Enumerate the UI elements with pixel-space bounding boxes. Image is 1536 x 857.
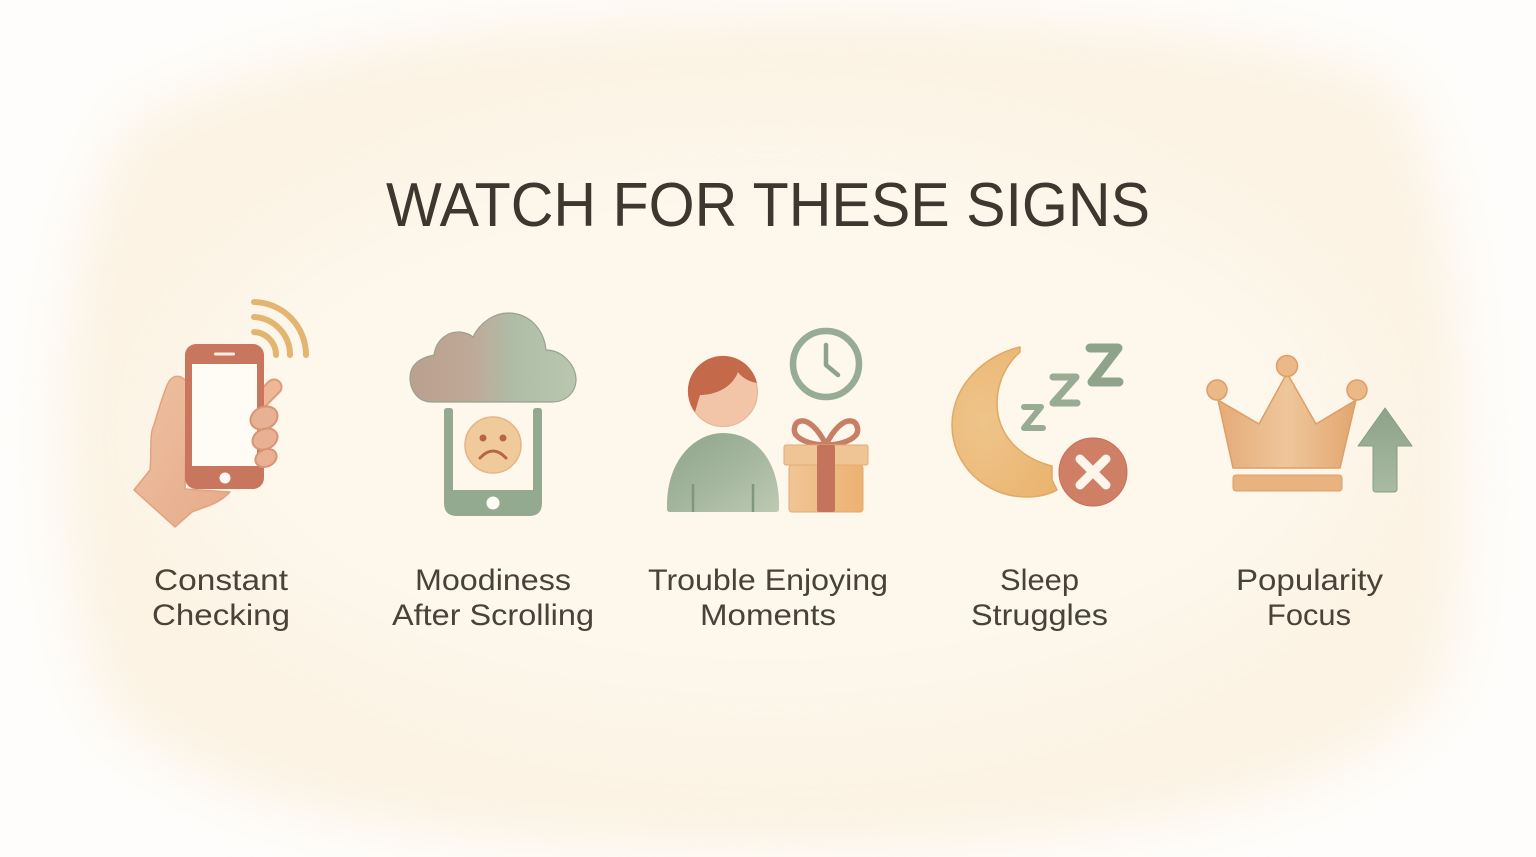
label: trouble enjoying moments: Moments xyxy=(700,599,836,632)
icon: crown with up arrow xyxy=(1207,356,1412,492)
sign: moodiness after scrolling xyxy=(392,313,594,632)
label: popularity focus: Popularity xyxy=(1236,564,1383,597)
sign: constant checking xyxy=(134,302,306,632)
label: popularity focus xyxy=(1236,564,1383,632)
label: trouble enjoying moments xyxy=(648,564,888,632)
label: moodiness after scrolling: After Scrolling xyxy=(392,599,594,632)
label: constant checking xyxy=(152,564,290,632)
label: constant checking: Checking xyxy=(152,599,290,632)
label: moodiness after scrolling: Moodiness xyxy=(415,564,571,597)
label: moodiness after scrolling xyxy=(392,564,594,632)
label: constant checking: Constant xyxy=(154,564,289,597)
label: trouble enjoying moments: Trouble Enjoying xyxy=(648,564,888,597)
sign: popularity focus xyxy=(1207,356,1412,632)
label: sleep struggles: Struggles xyxy=(971,599,1108,632)
label: sleep struggles xyxy=(971,564,1108,632)
icon: person with clock and gift xyxy=(667,331,868,512)
label: popularity focus: Focus xyxy=(1267,599,1351,632)
icon: cloud over phone with sad face xyxy=(410,313,576,516)
icon: moon with z letters and x badge xyxy=(952,347,1127,506)
title: WATCH FOR THESE SIGNS xyxy=(386,171,1150,240)
sign: trouble enjoying moments xyxy=(648,331,888,632)
icon: hand holding phone with signal xyxy=(134,302,306,527)
sign: sleep struggles xyxy=(952,347,1127,632)
label: sleep struggles: Sleep xyxy=(1000,564,1079,597)
